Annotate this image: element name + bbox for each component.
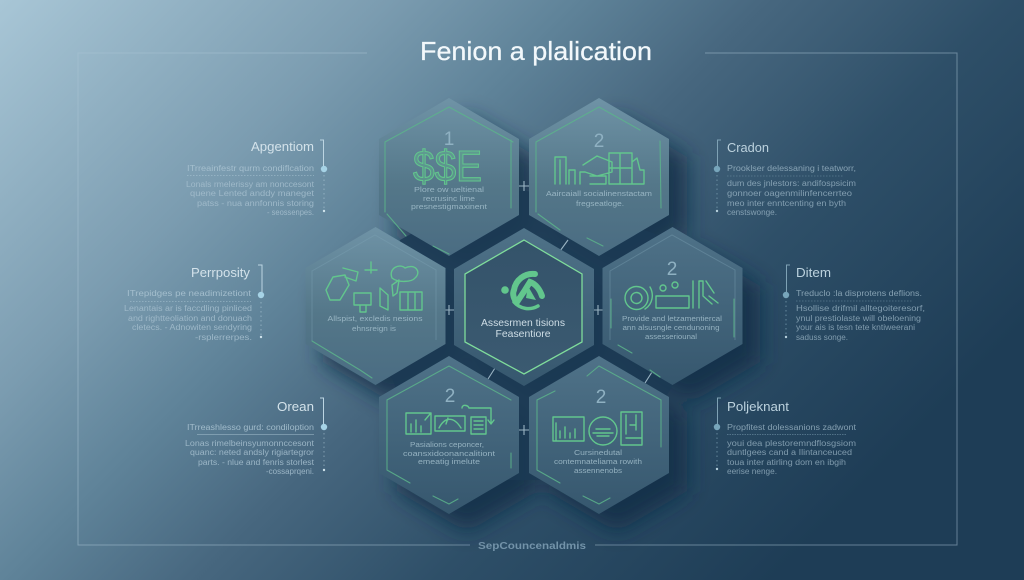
inner outline xyxy=(385,107,513,254)
callout heading: Ditem xyxy=(796,265,831,280)
panel: center hexagon: Feasentiore xyxy=(496,328,551,340)
callout text: your ais is tesn tete kntiweerani xyxy=(796,323,915,332)
hexagon cluster shadow xyxy=(323,116,760,532)
hexagon text: Provide and letzamentiercal xyxy=(622,314,722,323)
panel: left callout Orean xyxy=(185,398,327,476)
inner outline xyxy=(465,240,582,374)
callout text: duntlgees cand a Ilintanceuced xyxy=(727,448,852,457)
panel: center hexagon xyxy=(454,228,594,386)
callout text: Prooklser delessaning i teatworr, xyxy=(727,164,856,173)
inner outline xyxy=(387,366,511,504)
callout marker xyxy=(714,398,846,470)
callout text: Lenantais ar is faccdling pinliced xyxy=(124,304,252,313)
callout text xyxy=(185,423,315,476)
callout text: saduss songe. xyxy=(796,333,848,342)
callout text: -rsplerrerpes. xyxy=(195,333,252,342)
callout text: dum des jnlestors: andifospsicim xyxy=(727,179,856,188)
hexagon text: Aaircaiall socialinenstactam xyxy=(546,189,652,198)
panel: hexagon right: ann alsusngle cendunoning xyxy=(622,323,720,332)
panel: left callout Apgentiom xyxy=(186,139,327,217)
panel: hexagon bottom right: assennenobs xyxy=(574,466,622,475)
panel: hexagon 1: recrusinc lime xyxy=(423,194,475,203)
callout heading: Poljeknant xyxy=(727,399,789,414)
panel: right callout Cradon xyxy=(714,140,856,217)
inner outline xyxy=(536,107,661,246)
icon: assessment emblem xyxy=(501,274,542,309)
callout heading: Orean xyxy=(277,399,314,414)
number: 1 xyxy=(444,129,454,150)
panel: hexagon left: ehnsreign is xyxy=(352,324,396,333)
panel: left callout Perrposity xyxy=(124,265,264,342)
callout marker xyxy=(783,265,912,338)
icon: gears and nodes xyxy=(625,281,718,310)
callout text: ynul prestiolaste will obeloening xyxy=(796,314,921,323)
panel: hexagon 1: presnestigmaxinent xyxy=(411,202,488,211)
callout marker xyxy=(714,140,843,212)
callout text xyxy=(727,423,857,476)
callout text: ITrepidges pe neadimizetiont xyxy=(127,289,252,298)
number: 2 xyxy=(667,259,677,280)
callout text: Treduclo :la disprotens deflions. xyxy=(796,289,922,298)
callout text: Lonas rimelbeinsyumonnccesont xyxy=(185,439,315,448)
hexagon text: Plore ow ueltienal xyxy=(414,185,484,194)
callout text: Propfitest dolessanions zadwont xyxy=(727,423,857,432)
icon: factory and cloud xyxy=(326,262,422,312)
callout text xyxy=(186,164,315,217)
callout text: eerise nenge. xyxy=(727,467,777,476)
callout text: cletecs. - Adnowiten sendyring xyxy=(132,323,252,332)
panel: hexagon right xyxy=(602,227,742,385)
panel: hexagon right: assesseriounal xyxy=(645,332,697,341)
panel: right callout Poljeknant xyxy=(714,398,857,476)
callout text: -cossaprqeni. xyxy=(266,467,314,476)
callout text: quanc: neted andsly rigiartegror xyxy=(190,448,314,457)
callout marker xyxy=(187,140,327,212)
connector marks xyxy=(443,181,652,435)
callout text xyxy=(727,164,856,217)
callout marker xyxy=(130,265,264,338)
callout text: ITrreainfestr qurm condiflcation xyxy=(187,164,314,173)
callout heading: Perrposity xyxy=(191,265,250,280)
callout text: ITrreashlesso gurd: condiloption xyxy=(187,423,314,432)
callout text: gonnoer oagenmilinfencerrteo xyxy=(727,189,853,198)
hexagon text: Pasialions ceponcer, xyxy=(410,440,484,449)
panel: hexagon bottom right xyxy=(529,356,669,514)
footer label: SepCouncenaldmis xyxy=(478,540,586,552)
title: Fenion a plalication xyxy=(420,36,652,66)
callout text: parts. - nlue and fenris storlest xyxy=(198,458,315,467)
panel: hexagon 2 xyxy=(529,98,669,256)
panel: hexagon bottom left xyxy=(379,356,519,514)
panel: right callout Ditem xyxy=(783,265,925,342)
callout marker xyxy=(197,398,327,471)
icon: charts and document xyxy=(406,405,494,434)
callout text: Lonals rmelerissy am nonccesont xyxy=(186,180,315,189)
icon: currency glyphs: $$E xyxy=(413,142,482,191)
frame xyxy=(78,53,957,545)
callout text: patss - nua annfonnis storing xyxy=(197,199,314,208)
callout text: meo inter enntcenting en byth xyxy=(727,199,846,208)
inner outline xyxy=(537,366,661,504)
callout text xyxy=(796,289,925,342)
hexagon text: Cursinedutal xyxy=(574,448,622,457)
inner outline xyxy=(610,235,735,340)
inner outline xyxy=(312,235,436,341)
callout text: and rightteoliation and donuach xyxy=(128,314,252,323)
dark joint area between hexagons xyxy=(375,190,700,480)
panel: hexagon bottom left: emeatig imelute xyxy=(418,457,480,466)
panel: hexagon bottom left: coansxidoonancalitiont xyxy=(403,449,496,458)
hexagon text: Assesrmen tisions xyxy=(481,317,565,329)
callout text xyxy=(124,289,252,342)
callout text: youi dea plestoremndflosgsiom xyxy=(727,439,856,448)
callout text: quene Lented anddy maneget xyxy=(190,189,315,198)
callout heading: Apgentiom xyxy=(251,139,314,154)
hexagon text: Allspist, excledis nesions xyxy=(328,314,423,323)
number: 2 xyxy=(596,387,606,408)
panel: hexagon 1 xyxy=(379,98,519,256)
callout text: censtswonge. xyxy=(727,208,777,217)
panel: hexagon 2: fregseatloge. xyxy=(576,199,624,208)
number: 2 xyxy=(445,386,455,407)
number: 2 xyxy=(594,131,604,152)
panel: hexagon left xyxy=(306,227,446,385)
panel: hexagon bottom right: contemnateliama rowith xyxy=(554,457,642,466)
icon: dashboard and plan xyxy=(553,412,642,445)
callout text: toua inter atirling dom en ibgih xyxy=(727,458,846,467)
icon: buildings xyxy=(555,153,644,184)
callout heading: Cradon xyxy=(727,140,769,155)
callout text: - seossenpes. xyxy=(267,208,314,217)
callout text: Hsollise drifmil alltegoiteresorf, xyxy=(796,304,925,313)
